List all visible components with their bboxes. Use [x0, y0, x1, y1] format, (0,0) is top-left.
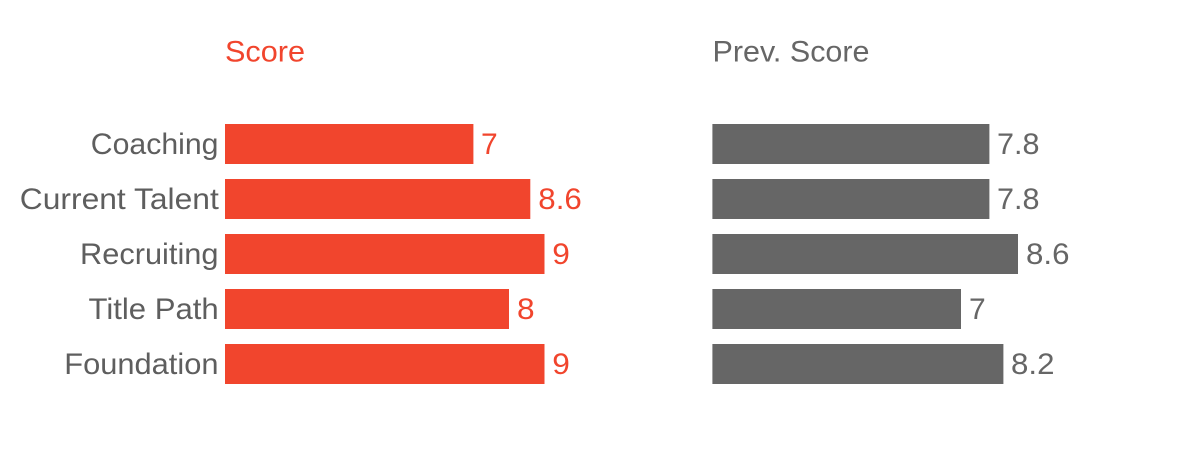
bar: Current Talent 8.6: [225, 179, 582, 219]
bar: Recruiting 9: [225, 234, 570, 274]
label: Recruiting: Recruiting: [80, 238, 218, 271]
label: Coaching: Coaching: [91, 128, 218, 161]
bar: Recruiting 8.6: 8.6: [1026, 238, 1070, 271]
bar: Coaching 7: [225, 124, 498, 164]
bar: Recruiting 8.6: [712, 234, 1070, 274]
heading: Prev. Score: Prev. Score: [712, 36, 870, 68]
bar chart: Prev. Score: [712, 124, 1070, 384]
bar: Title Path 7: 7: [969, 293, 986, 326]
bar: Coaching 7: 7: [481, 128, 498, 161]
bar: Foundation 8.2: 8.2: [1011, 348, 1054, 381]
bar: Foundation 9: [225, 344, 570, 384]
bar: Foundation 8.2: [712, 344, 1054, 384]
category labels: [20, 128, 219, 381]
bar: Coaching 7.8: [712, 124, 1040, 164]
bar: Title Path 7: [712, 289, 986, 329]
bar: Current Talent 7.8: [712, 179, 1040, 219]
label: Current Talent: Current Talent: [20, 183, 219, 216]
bar: Coaching 7.8: 7.8: [997, 128, 1040, 161]
bar: Current Talent 8.6: 8.6: [538, 183, 582, 216]
bar: Foundation 9: 9: [552, 348, 570, 381]
bar: Current Talent 7.8: 7.8: [997, 183, 1040, 216]
bar: Title Path 8: 8: [517, 293, 535, 326]
bar: Recruiting 9: 9: [552, 238, 570, 271]
label: Foundation: Foundation: [64, 348, 218, 381]
label: Title Path: Title Path: [88, 293, 219, 326]
heading: Score: Score: [225, 36, 305, 68]
bar chart: Score: [225, 124, 582, 384]
bar: Title Path 8: [225, 289, 535, 329]
